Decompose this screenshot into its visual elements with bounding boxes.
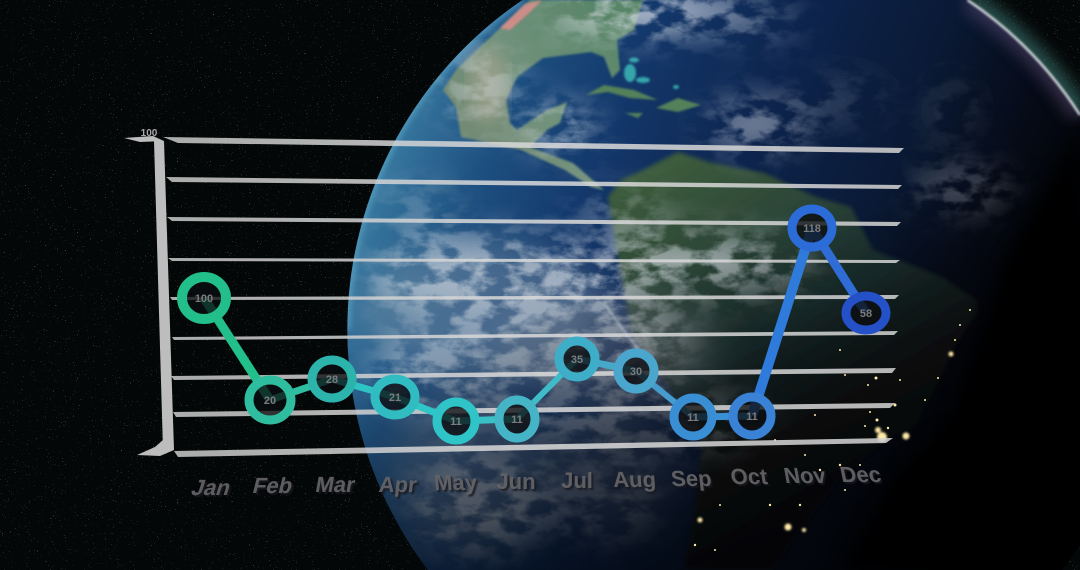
line chart (124, 128, 904, 500)
point: Dec: 58 (860, 308, 872, 320)
point: Jun: 11 (511, 414, 523, 426)
point: Jul (559, 341, 595, 377)
point: Dec (846, 296, 886, 330)
label: Dec: Dec (838, 462, 883, 487)
point: Sep: 11 (687, 412, 699, 424)
month labels (188, 462, 883, 500)
land: South America (608, 152, 977, 570)
label: Oct: Oct (729, 464, 770, 489)
land: red-tinted patch at top (500, 0, 542, 30)
land: North and Central America (443, 0, 643, 190)
purple night rim on the right limb (968, 0, 1080, 115)
point: May (437, 402, 475, 440)
clouds (354, 0, 1021, 566)
point: Apr: 21 (389, 392, 401, 404)
land: Caribbean islands (586, 85, 701, 118)
point: Feb (249, 380, 291, 420)
atmosphere glow around Earth's top right limb (968, 0, 1080, 115)
label: Jul: Jul (561, 468, 593, 493)
ocean (340, 0, 1080, 570)
label: Aug: Aug (612, 467, 657, 492)
point: Oct: 11 (746, 411, 758, 423)
coastal white streak (604, 303, 640, 352)
point: Jun (499, 400, 535, 438)
point: Feb: 20 (264, 395, 276, 407)
point: Jul: 35 (571, 354, 583, 366)
label: Feb: Feb (250, 473, 295, 498)
label: Jan: Jan (188, 476, 234, 500)
point: Oct (733, 397, 771, 435)
grey haze over the lower-left cloud band (360, 240, 720, 550)
vertical axis with top shelf and foot: 100 (141, 128, 158, 139)
point: Jan (182, 277, 226, 319)
point: Sep (674, 398, 712, 436)
point: Mar: 28 (326, 374, 338, 386)
label: Apr: Apr (378, 472, 418, 497)
bright limb highlight at top right (968, 0, 1080, 115)
label: Sep: Sep (670, 466, 713, 491)
night shadow on lower part (354, 253, 979, 570)
connecting line segments (204, 228, 866, 421)
point: Aug (618, 353, 654, 389)
point: Apr (375, 379, 415, 415)
point: Nov (792, 209, 832, 247)
point: May: 11 (450, 416, 462, 428)
point: Jan: 100 (195, 293, 213, 305)
Bahamas turquoise shallows (624, 58, 679, 89)
label: May: May (433, 470, 478, 495)
chart grid lines (163, 137, 904, 457)
Earth globe (347, 0, 1080, 570)
point: Aug: 30 (630, 366, 642, 378)
vertical axis with top shelf and foot (124, 128, 174, 456)
point: Nov: 118 (803, 223, 821, 235)
label: Nov: Nov (782, 463, 828, 488)
label: Jun: Jun (496, 469, 536, 494)
data points (182, 209, 886, 440)
point: Mar (312, 360, 352, 398)
land: tan Mexico and US interior (468, 47, 508, 123)
dark night hemisphere on the right (1004, 170, 1069, 294)
left limb blue haze (347, 0, 522, 330)
city lights (694, 309, 971, 551)
label: Mar: Mar (314, 472, 357, 497)
